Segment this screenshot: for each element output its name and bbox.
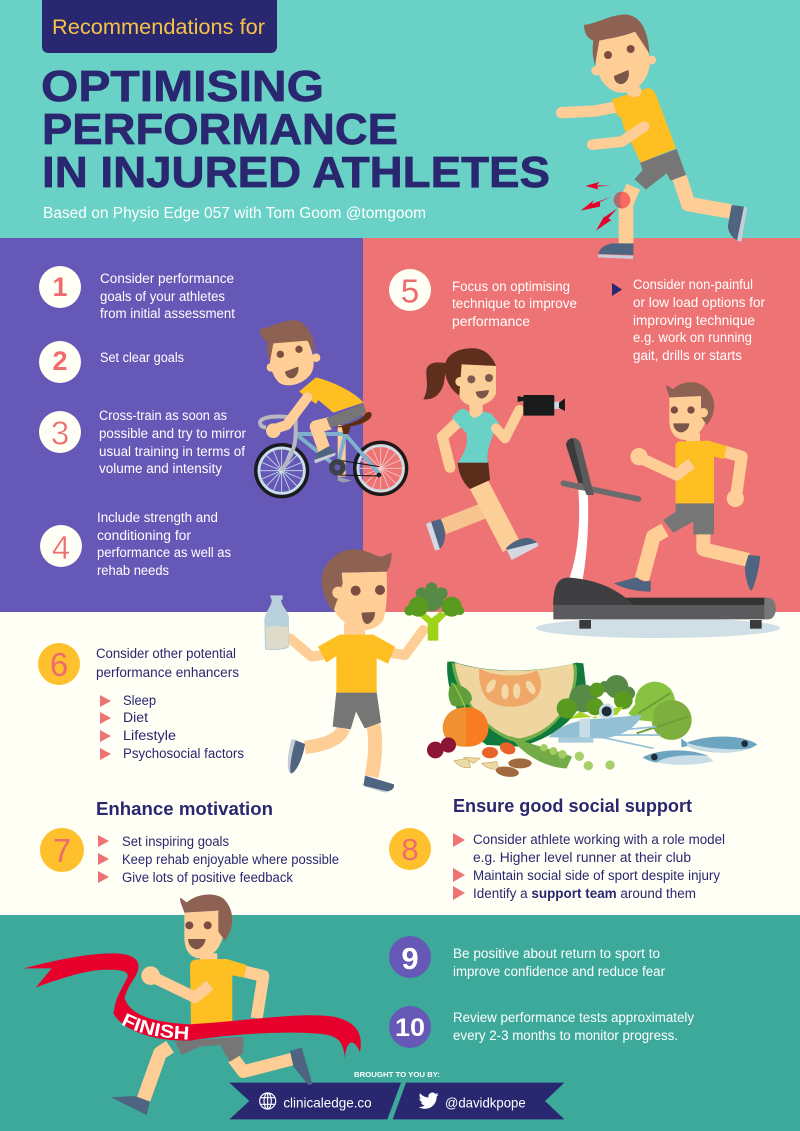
recommendation 8: Maintain social side of sport despite injury <box>473 868 720 883</box>
illustration: woman filming <box>423 348 565 560</box>
recommendation 5: technique to improve <box>452 296 577 311</box>
recommendation 7: Give lots of positive feedback <box>122 870 293 885</box>
footer ribbon: twitter: @davidkpope <box>445 1094 526 1110</box>
recommendation 2 <box>39 341 184 383</box>
recommendation 8: e.g. Higher level runner at their club <box>473 850 691 865</box>
recommendation 4: Include strength and <box>97 510 218 525</box>
title: OPTIMISING <box>41 62 324 111</box>
panel: green recommendations 9-10 <box>0 915 800 1131</box>
title <box>41 62 550 197</box>
recommendation 5 detail <box>612 277 766 363</box>
recommendation 8: Ensure good social support <box>453 796 692 816</box>
recommendation 5 <box>389 269 577 329</box>
recommendation 3 <box>39 408 247 476</box>
illustration: runner at finish line <box>24 894 361 1115</box>
illustration: runner at finish line: FINISH <box>122 1013 188 1040</box>
recommendation 9 <box>389 936 666 979</box>
recommendation 7 <box>40 799 339 885</box>
title: IN INJURED ATHLETES <box>42 148 550 197</box>
recommendation 6: Consider other potential <box>96 646 236 661</box>
illustration: man with milk and broccoli <box>264 549 464 792</box>
recommendation 9: 9 <box>401 941 419 976</box>
recommendation 5: 5 <box>401 272 419 310</box>
recommendation 1: goals of your athletes <box>100 289 225 304</box>
footer ribbon: website: clinicaledge.co <box>283 1094 372 1110</box>
illustration: injured runner <box>562 14 747 259</box>
header tag: recommendations for <box>42 0 277 53</box>
footer ribbon: website <box>229 1083 401 1119</box>
illustration: healthy food <box>427 662 757 778</box>
recommendation 3: 3 <box>51 414 69 452</box>
recommendation 6 <box>38 643 244 761</box>
recommendation 8: Identify a support team around them <box>473 886 696 901</box>
recommendation 1 <box>39 266 235 321</box>
recommendation 8: 8 <box>401 832 419 867</box>
recommendation 1: 1 <box>52 272 68 302</box>
recommendation 5: Focus on optimising <box>452 279 570 294</box>
treadmill shadow <box>536 618 780 638</box>
recommendation 6: Diet <box>123 710 148 725</box>
title: PERFORMANCE <box>42 105 398 154</box>
recommendation 5: performance <box>452 314 530 329</box>
recommendation 10: Review performance tests approximately <box>453 1010 694 1025</box>
recommendation 2: 2 <box>52 346 68 376</box>
recommendation 5 detail: Consider non-painful <box>633 277 753 292</box>
recommendation 8 <box>389 796 725 901</box>
recommendation 1: from initial assessment <box>100 306 235 321</box>
recommendation 4 <box>40 510 231 578</box>
recommendation 10: every 2-3 months to monitor progress. <box>453 1028 678 1043</box>
recommendation 4: performance as well as <box>97 545 231 560</box>
footer ribbon: twitter <box>393 1083 564 1119</box>
recommendation 6: performance enhancers <box>96 665 239 680</box>
panel: header background <box>0 0 800 238</box>
recommendation 7: Set inspiring goals <box>122 834 229 849</box>
recommendation 9: Be positive about return to sport to <box>453 946 660 961</box>
recommendation 5 detail: improving technique <box>633 313 755 328</box>
panel: cream recommendations 6-8 <box>0 612 800 915</box>
recommendation 7: Enhance motivation <box>96 799 273 819</box>
recommendation 6: Psychosocial factors <box>123 746 244 761</box>
recommendation 10: 10 <box>395 1014 425 1042</box>
recommendation 10 <box>389 1006 694 1048</box>
recommendation 3: possible and try to mirror <box>99 426 247 441</box>
recommendation 6: 6 <box>50 646 68 683</box>
subtitle: Based on Physio Edge 057 with Tom Goom @tomgoom <box>43 205 426 222</box>
recommendation 4: conditioning for <box>97 528 192 543</box>
recommendation 6: Sleep <box>123 693 156 708</box>
illustration: treadmill <box>553 438 776 629</box>
recommendation 7: 7 <box>53 832 71 869</box>
recommendation 6: Lifestyle <box>123 728 176 743</box>
header tag: recommendations for: Recommendations for <box>52 16 265 39</box>
recommendation 5 detail: or low load options for <box>633 295 766 310</box>
recommendation 9: improve confidence and reduce fear <box>453 964 666 979</box>
credit label: BROUGHT TO YOU BY: <box>354 1070 440 1079</box>
illustration: cyclist <box>256 320 407 497</box>
recommendation 4: 4 <box>52 529 70 566</box>
recommendation 3: usual training in terms of <box>99 444 245 459</box>
recommendation 4: rehab needs <box>97 563 169 578</box>
recommendation 3: Cross-train as soon as <box>99 408 227 423</box>
illustration: man on treadmill <box>614 382 760 592</box>
recommendation 5 detail: gait, drills or starts <box>633 348 742 363</box>
recommendation 2: Set clear goals <box>100 350 184 365</box>
recommendation 8: Consider athlete working with a role model <box>473 832 725 847</box>
panel: purple recommendations 1-4 <box>0 238 363 612</box>
recommendation 1: Consider performance <box>100 271 234 286</box>
panel: coral recommendation 5 <box>363 238 800 612</box>
recommendation 5 detail: e.g. work on running <box>633 330 752 345</box>
recommendation 3: volume and intensity <box>99 461 222 476</box>
recommendation 7: Keep rehab enjoyable where possible <box>122 852 339 867</box>
